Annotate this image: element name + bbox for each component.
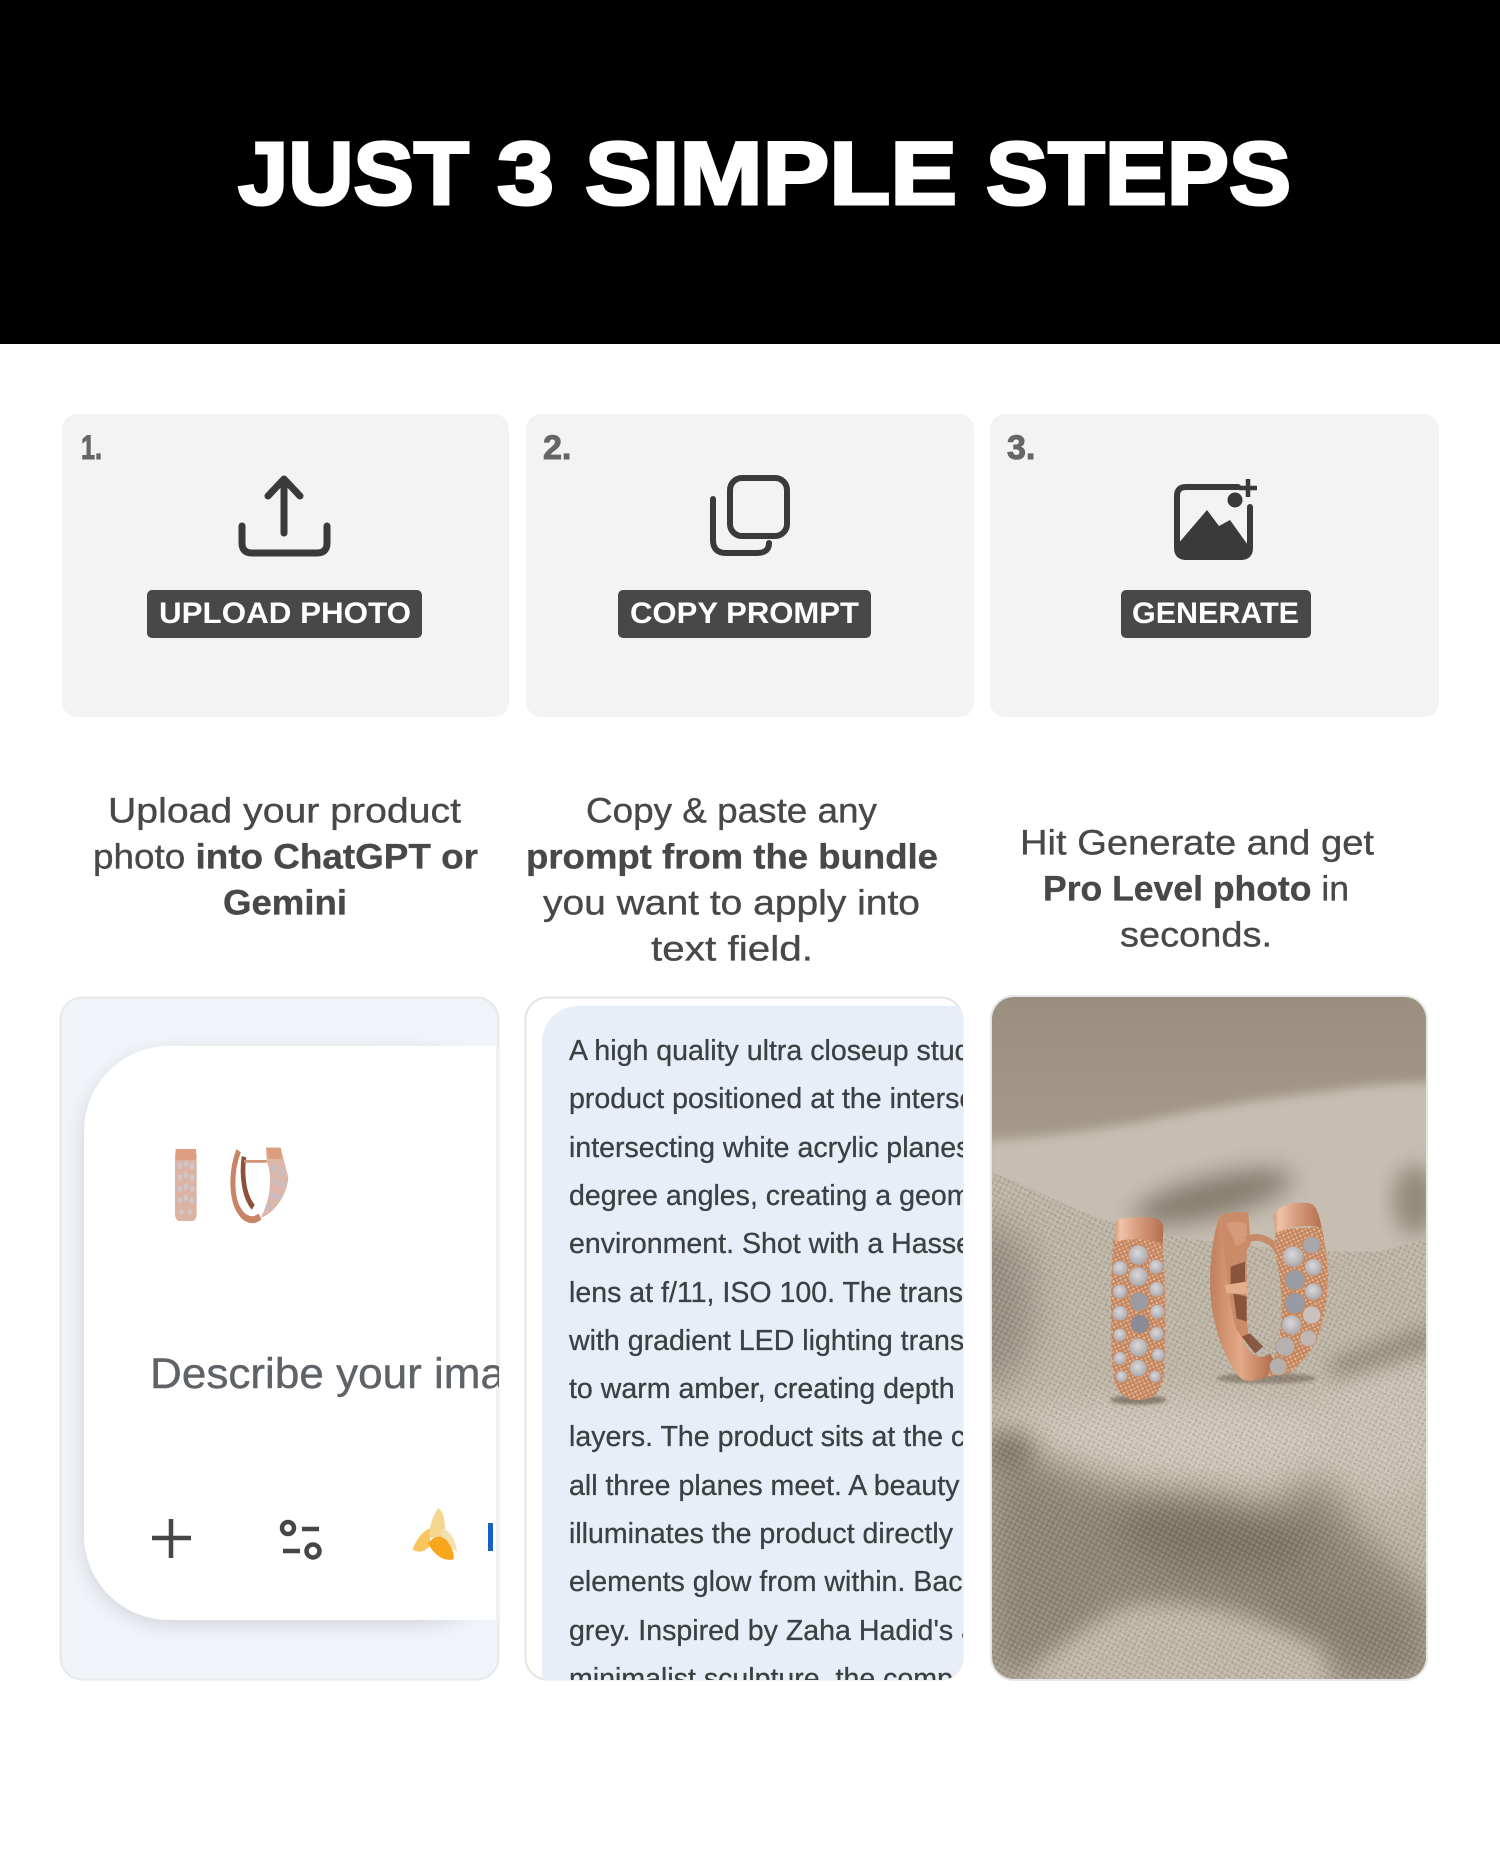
- panel: prompt text screenshot: [524, 996, 964, 1680]
- icon: upload arrow: [242, 479, 327, 553]
- prompt text: illuminates the product directly: [569, 1518, 954, 1550]
- hoop top arc: [1246, 1238, 1278, 1253]
- input card: [84, 1046, 496, 1620]
- label: generate: GENERATE: [1132, 597, 1299, 630]
- prompt text: minimalist sculpture, the composition: [569, 1663, 1035, 1695]
- ridge highlights: [1012, 1394, 1326, 1485]
- panel: step 2 copy prompt: [526, 414, 974, 717]
- prompt text: degree angles, creating a geometric: [569, 1180, 1024, 1212]
- text block: step 2 description: prompt from the bundle: [526, 838, 938, 876]
- text block: step 1 description: Upload your product: [108, 792, 461, 830]
- prompt text: [568, 1038, 963, 1680]
- label: copy prompt: [618, 590, 871, 638]
- lower light tongue: [1025, 1608, 1320, 1690]
- text block: step 1 description: [93, 792, 478, 922]
- step number 1: 1.: [81, 429, 102, 467]
- prompt text: product positioned at the intersection: [569, 1083, 1036, 1115]
- prompt text: intersecting white acrylic planes: [569, 1132, 970, 1164]
- front linen fabric: [992, 1173, 1426, 1679]
- prompt text: A high quality ultra closeup studio: [569, 1035, 993, 1067]
- icon: plus: [152, 1519, 191, 1558]
- icon: copy: [713, 478, 787, 553]
- prompt text: with gradient LED lighting transitioning: [568, 1325, 1055, 1357]
- panel: generated photo: [990, 995, 1428, 1681]
- label: copy prompt: COPY PROMPT: [630, 597, 859, 630]
- hoop interior: [1221, 1212, 1251, 1347]
- prompt text: grey. Inspired by Zaha Hadid's architecture: [569, 1615, 1110, 1647]
- title: [238, 123, 1291, 223]
- text block: step 1 description: Gemini: [223, 884, 347, 922]
- pave band: [1267, 1227, 1328, 1377]
- text block: step 3 description: Pro Level photo in: [1043, 870, 1349, 908]
- blue toolbar mark: [488, 1523, 493, 1551]
- text block: step 2 description: you want to apply into: [543, 884, 920, 922]
- main dark fold: [985, 1428, 1435, 1690]
- uploaded earrings thumbnail: [175, 1148, 288, 1221]
- step number 2: 2.: [543, 429, 571, 467]
- text block: step 3 description: seconds.: [1120, 916, 1272, 954]
- panel: step 1 upload photo: [62, 414, 509, 717]
- text block: step 2 description: Copy & paste any: [586, 792, 878, 830]
- prompt text: environment. Shot with a Hasselblad: [569, 1228, 1032, 1260]
- hoop outer wall: [1210, 1216, 1278, 1381]
- icon: image with plus: [1177, 479, 1257, 560]
- prompt text: to warm amber, creating depth: [569, 1373, 955, 1405]
- panel: step 3 generate: [990, 414, 1439, 717]
- header band: [0, 0, 1500, 344]
- earring right: [1210, 1203, 1328, 1384]
- step number 3: 3.: [1007, 429, 1035, 467]
- prompt bubble: [542, 1006, 963, 1680]
- panel: prompt box screenshot: [60, 996, 500, 1680]
- earring left: [1110, 1217, 1167, 1405]
- title: 3: [497, 123, 554, 223]
- left side shade: [992, 1210, 1048, 1400]
- label: upload photo: UPLOAD PHOTO: [159, 597, 411, 630]
- text block: step 2 description: text field.: [651, 930, 813, 968]
- icon: sliders: [282, 1522, 320, 1558]
- back fabric fold: [992, 1078, 1426, 1252]
- photo backdrop: [992, 997, 1426, 1152]
- label: upload photo: [147, 590, 422, 638]
- prompt text: layers. The product sits at the center: [569, 1421, 1031, 1453]
- text block: step 3 description: [1020, 824, 1374, 954]
- text block: step 1 description: photo into ChatGPT or: [93, 838, 478, 876]
- text block: step 2 description: [526, 792, 938, 968]
- title: SIMPLE: [585, 123, 957, 223]
- text block: step 3 description: Hit Generate and get: [1020, 824, 1374, 862]
- icon: banana: [413, 1508, 457, 1560]
- title: STEPS: [986, 123, 1291, 223]
- placeholder text: Describe your image: [150, 1350, 554, 1398]
- prompt text: elements glow from within. Background: [569, 1566, 1066, 1598]
- prompt text: all three planes meet. A beauty: [569, 1470, 960, 1502]
- shadow right of earrings: [1330, 1325, 1435, 1380]
- label: generate: [1121, 590, 1311, 638]
- weave texture: [992, 1140, 1428, 1680]
- title: JUST: [238, 123, 469, 223]
- prompt text: lens at f/11, ISO 100. The translucent: [569, 1277, 1039, 1309]
